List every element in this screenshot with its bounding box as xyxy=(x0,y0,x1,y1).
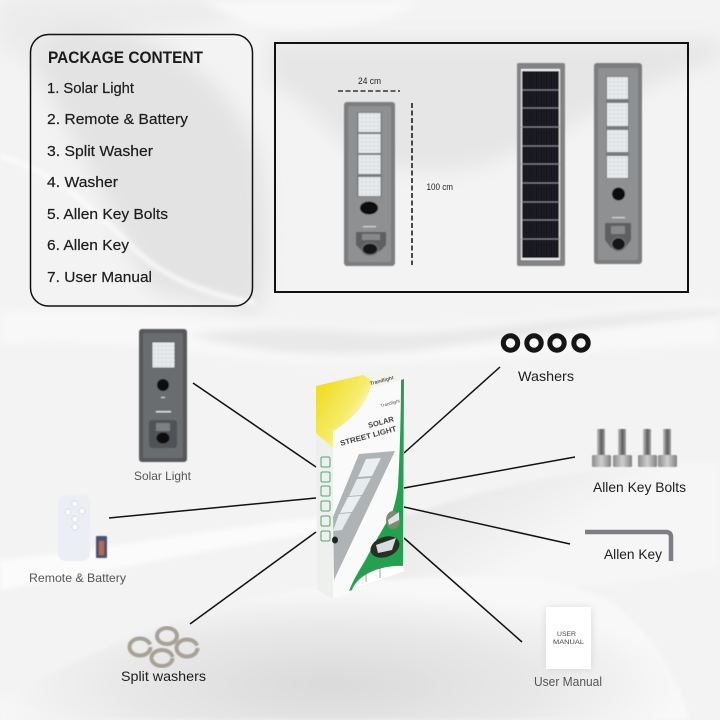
black rings xyxy=(503,336,588,350)
battery xyxy=(96,536,107,558)
item: user manual xyxy=(534,607,602,689)
product box xyxy=(316,367,404,599)
washers xyxy=(130,628,198,666)
list of contents: 7. User Manual xyxy=(47,269,152,286)
manual: USER xyxy=(557,631,576,638)
list of contents: 2. Remote & Battery xyxy=(47,111,189,128)
label: Split washers xyxy=(121,668,206,684)
green swoosh xyxy=(349,379,404,591)
box brand: Trandlight xyxy=(380,398,401,408)
list of contents: 5. Allen Key Bolts xyxy=(47,206,168,223)
lamp photo xyxy=(139,329,187,462)
label: Allen Key Bolts xyxy=(593,479,686,495)
label: User Manual xyxy=(534,675,602,689)
box faces xyxy=(316,367,404,599)
solar panel rear view xyxy=(517,63,565,266)
item: washers xyxy=(503,336,588,384)
list of contents: 6. Allen Key xyxy=(47,237,130,254)
box title: SOLAR xyxy=(367,414,395,430)
lamp picture on box xyxy=(332,451,395,580)
label: Solar Light xyxy=(134,469,192,483)
manual xyxy=(546,607,591,669)
dimension: height 100 cm: 100 cm xyxy=(426,182,453,192)
list of contents: 3. Split Washer xyxy=(47,143,153,160)
lamp front view xyxy=(594,63,642,264)
list of contents xyxy=(47,80,189,286)
item: solar light xyxy=(134,329,192,483)
box title: STREET LIGHT xyxy=(339,424,398,448)
dimension: width 24 cm xyxy=(338,76,400,91)
label: Remote & Battery xyxy=(29,571,126,585)
label: Allen Key xyxy=(604,546,662,562)
item: remote and battery xyxy=(29,495,126,585)
box title xyxy=(336,414,398,448)
connector lines xyxy=(109,367,575,642)
remote xyxy=(58,495,90,561)
box photos xyxy=(352,511,403,590)
item: allen key xyxy=(585,532,671,562)
dimension: width 24 cm: 24 cm xyxy=(358,76,381,86)
box brand xyxy=(369,375,401,409)
side icons xyxy=(321,457,330,541)
item: allen key bolts xyxy=(592,429,686,495)
item: split washers xyxy=(121,628,206,684)
list of contents: 1. Solar Light xyxy=(47,80,135,97)
panel: product dimensions xyxy=(275,43,688,292)
manual: MANUAL xyxy=(553,639,584,646)
panel: package content xyxy=(30,34,252,306)
heading: package content: PACKAGE CONTENT xyxy=(48,49,203,67)
box brand: Trandlight xyxy=(369,375,395,387)
list of contents: 4. Washer xyxy=(47,174,118,191)
label: Washers xyxy=(518,368,574,384)
key xyxy=(585,532,671,561)
lamp front view with measures xyxy=(344,102,395,266)
yellow corner xyxy=(316,375,372,448)
bolts xyxy=(592,429,677,467)
